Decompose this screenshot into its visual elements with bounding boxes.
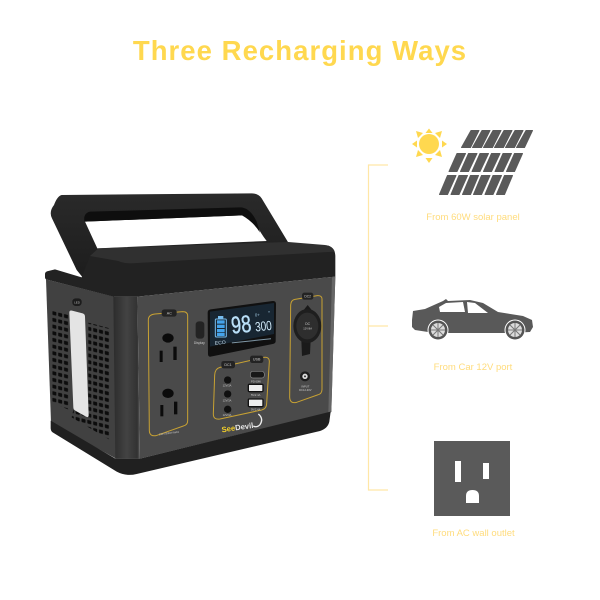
front panel [137,277,335,459]
caption: From AC wall outlet [432,528,515,539]
corner column [113,297,140,459]
title: Three Recharging Ways [133,35,467,66]
DC and USB panel: DC1 [224,363,232,367]
cigarette socket [293,305,321,356]
AC sockets panel [148,309,188,436]
AC sockets panel: AC [167,312,172,316]
lid top plane [90,242,335,263]
USB ports [250,371,264,378]
power station [45,193,335,475]
wall outlet source [432,441,515,539]
DC and USB panel: 12V/3A [223,399,232,403]
caption: From 60W solar panel [426,212,520,223]
DC2 panel [290,293,322,403]
cigarette socket: DC [305,322,311,326]
handle inner shadow [84,207,260,233]
connector lines [303,165,388,490]
side label [72,298,82,306]
caption: From Car 12V port [434,362,513,373]
car source [412,299,533,373]
carry handle [51,193,293,277]
DC and USB panel: 12V/3A [223,384,232,388]
LCD screen: 0+ [255,313,260,318]
lid [45,242,335,297]
side label: LED [74,300,81,304]
display button [194,321,205,345]
input port [300,371,310,381]
cigarette socket: 12V/8A [303,326,312,330]
DC2 panel: INPUT [301,385,310,389]
DC and USB panel: 5V/2.4A [251,393,261,397]
display button: Display [194,341,205,345]
battery gauge [215,316,226,337]
DC and USB panel: 12V/3A [223,413,232,417]
lid front band [45,245,335,297]
icon: solar panel [440,130,532,194]
outlet bottom [160,389,177,416]
DC and USB panel: USB [253,358,261,362]
DC and USB panel: PD 60W [251,379,261,383]
DC ports [224,376,231,413]
left face [46,279,116,459]
DC and USB panel: 5V/2.4A [251,408,261,412]
LCD screen [208,301,276,357]
icon: wall outlet [434,441,510,516]
LCD screen: 98 [230,311,253,340]
base [51,412,331,475]
icon: car [412,299,533,340]
LCD screen: 300 [254,318,273,334]
DC2 panel: DC12-30V [299,388,312,392]
DC and USB panel [213,356,269,419]
side window [69,311,89,417]
brand logo: SeeDevil [221,421,254,434]
LCD screen: * [268,310,270,315]
icon: sun [412,128,447,163]
solar source [412,128,532,223]
DC2 panel: DC2 [304,295,311,299]
LCD screen: ECO [215,340,226,347]
brand logo [221,414,262,434]
AC sockets panel: 110V/300W MAX [159,430,179,436]
outlet top [160,333,177,362]
vents [52,311,110,440]
